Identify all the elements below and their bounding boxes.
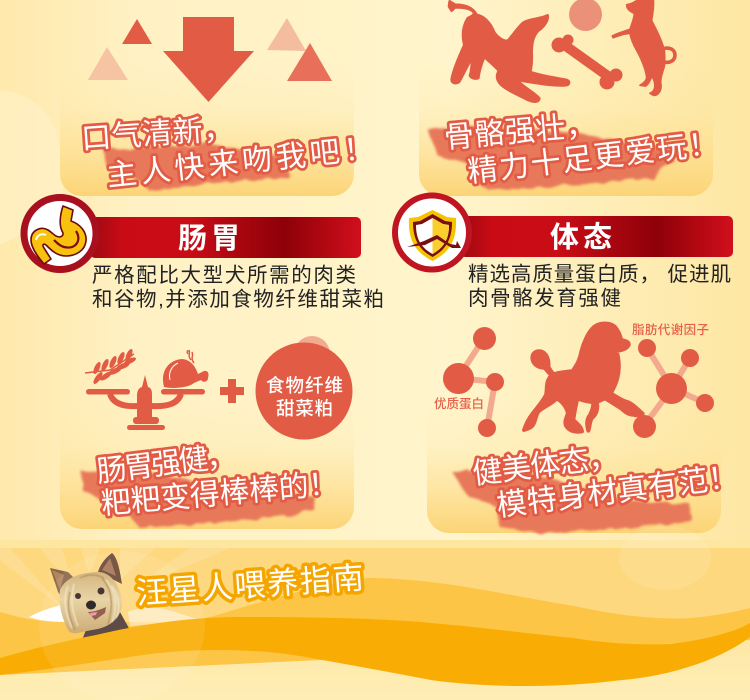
heading: gut: 肠胃 bbox=[178, 223, 244, 255]
slogan: fresh breath: 主人快来吻我吧！ bbox=[105, 132, 375, 193]
icon: plus bbox=[220, 379, 244, 403]
text block: body shape description: 精选高质量蛋白质， 促进肌 bbox=[468, 263, 731, 286]
illustration: ball bbox=[569, 0, 602, 31]
chart: protein molecule bbox=[443, 327, 504, 437]
slogan: body shape bbox=[471, 440, 740, 523]
brush stroke bbox=[82, 468, 316, 528]
slogan: fresh breath: 口气清新， bbox=[80, 112, 234, 156]
text block: gut description bbox=[92, 264, 384, 311]
callout: fibre circle: 食物纤维 bbox=[266, 375, 343, 396]
chart: fat metabolism molecule bbox=[633, 339, 714, 438]
wave: dark band bbox=[0, 617, 750, 686]
heading: body shape: 体态 bbox=[550, 221, 616, 254]
slogan: strong bones: 精力十足更爱玩！ bbox=[466, 127, 720, 189]
photo: yorkie dog bbox=[50, 553, 133, 640]
illustration: poodle bbox=[524, 323, 643, 432]
slogan: healthy gut: 肠胃强健， bbox=[95, 439, 238, 489]
illustration: scale with wheat and ham bbox=[85, 348, 209, 430]
decoration: white highlight bbox=[29, 604, 72, 622]
slogan: body shape: 健美体态， bbox=[471, 440, 620, 491]
text block: gut description: 和谷物,并添加食物纤维甜菜粕 bbox=[92, 288, 384, 311]
badge: shield icon bbox=[395, 196, 469, 270]
panel: body shape bbox=[427, 322, 740, 533]
label: protein: 优质蛋白 bbox=[434, 396, 484, 411]
illustration: jumping dog bbox=[612, 0, 675, 95]
callout: fibre circle: 甜菜粕 bbox=[276, 398, 333, 419]
text block: gut description: 严格配比大型犬所需的肉类 bbox=[92, 264, 356, 287]
text block: body shape description: 肉骨骼发育强健 bbox=[468, 287, 621, 310]
slogan: healthy gut: 粑粑变得棒棒的！ bbox=[100, 467, 340, 521]
callout: fibre circle bbox=[256, 336, 352, 440]
text block: body shape description bbox=[468, 263, 731, 310]
section: gut header bbox=[24, 198, 361, 270]
icons: triangles bbox=[88, 18, 332, 81]
label: fat factor: 脂肪代谢因子 bbox=[632, 322, 709, 337]
slogan: body shape: 模特身材真有范！ bbox=[495, 461, 740, 523]
illustration: bone bbox=[552, 34, 622, 90]
badge: stomach icon bbox=[24, 198, 96, 270]
panel: healthy gut bbox=[60, 336, 354, 529]
slogan: strong bones: 骨骼强壮， bbox=[443, 109, 597, 155]
title bar: gut bbox=[90, 217, 361, 258]
wave: light band bbox=[0, 578, 750, 675]
title bar: body shape bbox=[460, 216, 733, 257]
icon: down arrow bbox=[163, 17, 254, 102]
slogan: fresh breath bbox=[80, 112, 375, 193]
section: body shape header bbox=[395, 196, 733, 270]
brush stroke bbox=[452, 470, 692, 533]
brush stroke bbox=[428, 124, 674, 191]
slogan: feeding guide: 汪星人喂养指南 bbox=[135, 560, 365, 611]
panel: strong bones bbox=[419, 0, 720, 196]
banner: feeding guide bbox=[0, 526, 750, 700]
slogan: healthy gut bbox=[95, 439, 340, 521]
illustration: playing dog bbox=[449, 1, 569, 102]
panel: fresh breath bbox=[60, 17, 375, 196]
brush stroke bbox=[103, 144, 292, 191]
